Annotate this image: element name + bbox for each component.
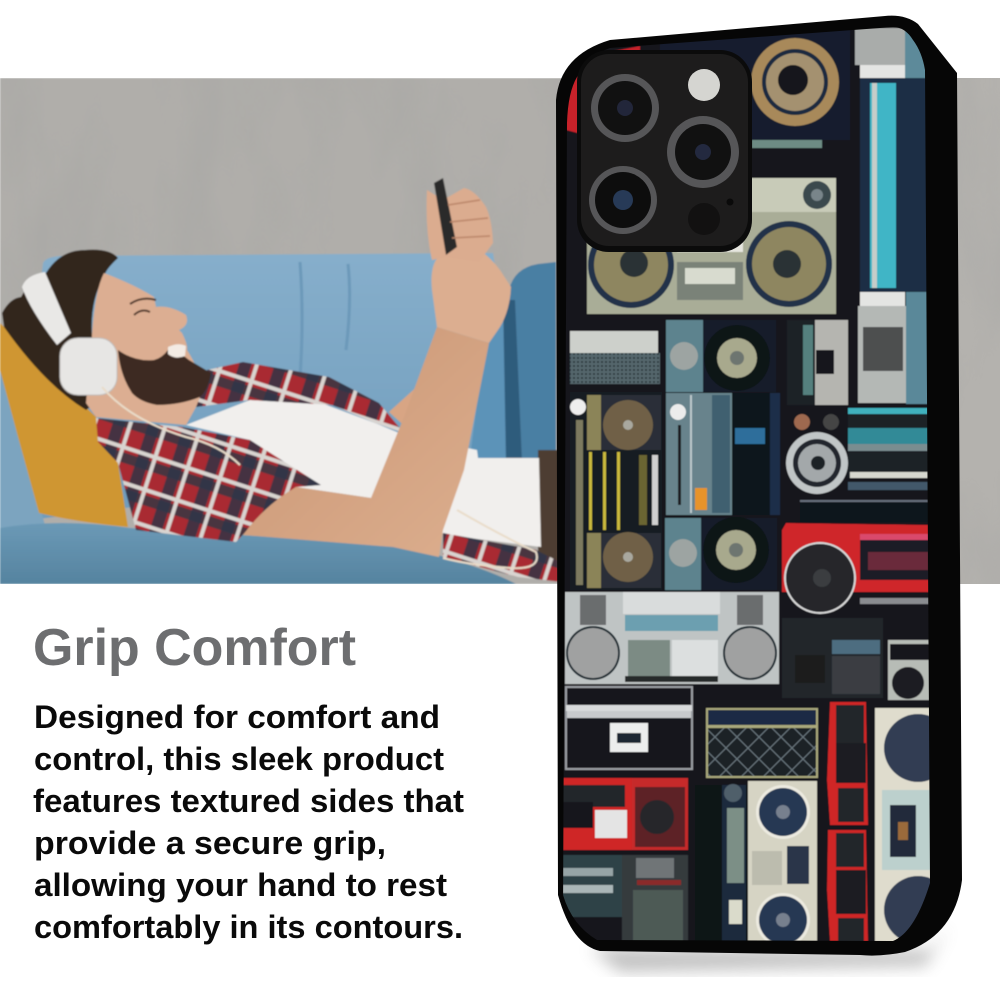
cassette radio	[787, 320, 848, 405]
far arm	[388, 389, 414, 424]
teal speaker panel bottom	[665, 517, 777, 590]
phone shadow	[590, 925, 950, 972]
body text: comfortably in its contours.	[34, 909, 463, 945]
red tape player	[563, 778, 688, 850]
plaid shirt	[96, 418, 321, 542]
t-shirt	[186, 400, 541, 547]
plaid collar	[196, 362, 404, 433]
sensor	[688, 203, 720, 235]
lens 2	[667, 116, 739, 188]
tape deck	[566, 687, 692, 769]
small phone	[434, 178, 457, 255]
mustard pillow	[0, 323, 128, 527]
body text: features textured sides that	[33, 783, 464, 819]
cream boombox	[875, 708, 952, 944]
gold speaker	[660, 30, 850, 140]
small right speaker	[888, 640, 930, 700]
case body	[556, 16, 962, 956]
flash	[688, 69, 720, 101]
phone case	[555, 16, 962, 956]
headphones	[22, 272, 117, 395]
hair	[2, 250, 118, 410]
smile	[168, 344, 186, 358]
dark radio	[782, 618, 883, 698]
cable	[102, 387, 537, 568]
face	[86, 273, 200, 425]
red column radios	[827, 702, 868, 942]
large silver boombox	[565, 592, 779, 684]
teal deck	[848, 408, 930, 490]
fingers	[448, 200, 490, 238]
camera module	[577, 50, 752, 252]
lens 3	[589, 166, 657, 234]
silver grille radio	[570, 331, 660, 384]
body text: provide a secure grip,	[34, 825, 386, 861]
man	[2, 178, 562, 582]
body text: control, this sleek product	[34, 741, 444, 777]
silver speaker	[786, 414, 848, 494]
plaid lower	[443, 533, 562, 582]
sofa	[0, 253, 562, 584]
body text: Designed for comfort and	[34, 699, 440, 735]
tall blue radio	[855, 28, 930, 404]
beard	[118, 350, 211, 405]
body text	[33, 699, 464, 945]
upper hand	[427, 188, 493, 262]
right wall strip	[950, 78, 1000, 584]
lower hand	[432, 242, 511, 343]
concrete wall	[0, 78, 562, 584]
body text: allowing your hand to rest	[34, 867, 447, 903]
teal speaker panel top	[666, 320, 776, 392]
red radio behind camera	[566, 46, 640, 135]
tall tuner	[695, 784, 748, 942]
green boombox	[587, 140, 836, 314]
lens 1	[591, 74, 659, 142]
printed back	[555, 20, 952, 950]
heading: Grip Comfort	[33, 619, 356, 677]
hi-fi bottom	[563, 855, 688, 943]
eye	[130, 299, 156, 315]
guitar amp	[706, 708, 818, 778]
brown speaker tile	[570, 392, 662, 590]
microphone	[726, 198, 734, 206]
equaliser panel	[666, 393, 780, 515]
silver cassette boombox	[748, 781, 817, 947]
photo: man on sofa	[0, 78, 562, 584]
forearm	[243, 327, 489, 557]
red boombox	[782, 500, 930, 614]
